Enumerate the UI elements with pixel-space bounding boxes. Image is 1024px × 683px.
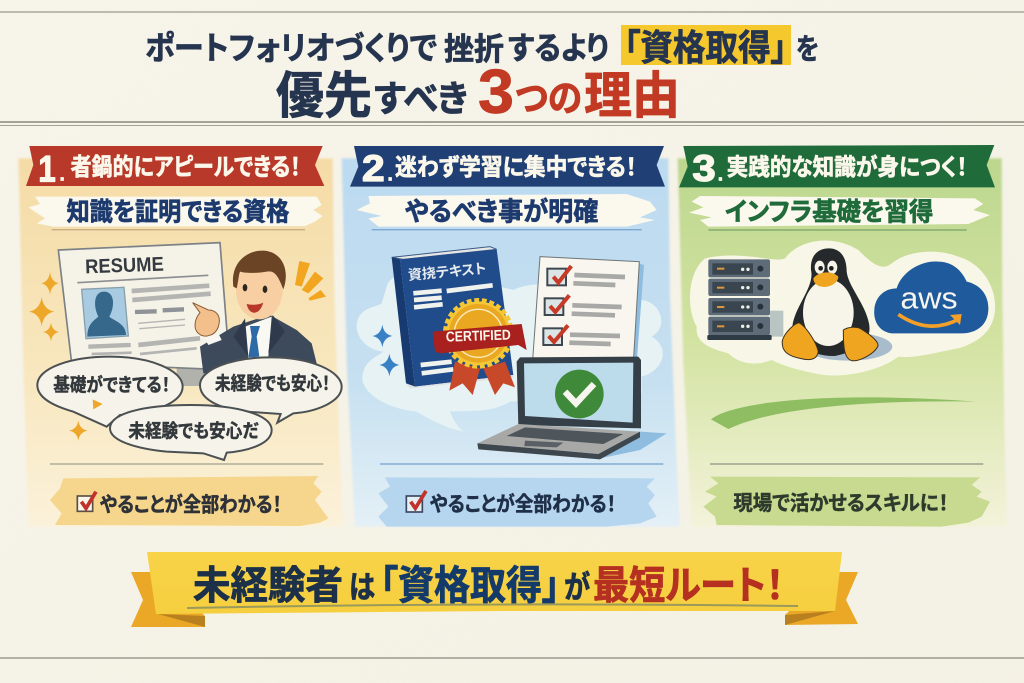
ribbon 2: 2 <box>362 147 385 189</box>
banner text: 未経験者 <box>193 565 343 608</box>
callout 2 <box>378 477 657 527</box>
panel 2 background <box>342 158 680 527</box>
icon: aws cloud: aws <box>900 281 958 315</box>
ribbon 3: 実践的な知識が身につく！ <box>727 153 967 180</box>
banner text: 「資格取得」 <box>380 564 560 608</box>
illustration: resume: RESUME <box>85 254 164 278</box>
callout 2: やることが全部わかる！ <box>430 492 616 516</box>
illustration: penguin <box>782 248 892 361</box>
illustration: cloud backdrop <box>690 240 995 375</box>
subheading 2 <box>357 194 657 230</box>
title line 2: 優先 <box>276 68 372 124</box>
title rule <box>0 122 1024 126</box>
title line 1: ポートフォリオづくりで <box>145 30 437 66</box>
icon: checkbox <box>406 491 426 512</box>
banner underline <box>187 604 798 608</box>
ribbon 1 <box>26 146 324 190</box>
illustration: server rack <box>707 259 783 340</box>
ribbon 1: . <box>59 164 65 186</box>
icon: aws cloud <box>874 262 988 333</box>
subheading 3: インフラ基礎を習得 <box>725 199 933 227</box>
title line 1 <box>145 27 819 68</box>
illustration: certified badge <box>433 301 527 395</box>
title line 1: するより <box>508 31 609 66</box>
panel 2: study <box>342 146 680 527</box>
banner text <box>193 564 784 608</box>
ribbon 1: 者鍋的にアピールできる！ <box>71 154 301 181</box>
illustration: cloud backdrop <box>357 269 663 432</box>
title <box>145 25 819 127</box>
title line 1: を <box>796 34 819 66</box>
ribbon 2: . <box>387 164 393 186</box>
panel 1 background <box>18 158 343 527</box>
illustration: textbook: 資挠テキスト <box>407 260 487 283</box>
subheading 3 <box>689 196 990 230</box>
callout 1 <box>50 476 328 526</box>
speech bubble: 未経験でも安心だ: 未経験でも安心だ <box>128 420 259 441</box>
brush swoosh <box>711 397 977 429</box>
illustration: textbook <box>392 247 514 388</box>
top rule <box>0 11 1024 13</box>
banner text: 最短ルート！ <box>593 565 784 608</box>
subheading 2: やるべき事が明確 <box>404 197 598 227</box>
illustration: laptop <box>477 357 667 459</box>
bottom rule <box>0 657 1024 659</box>
title line 2 <box>276 58 680 127</box>
callout 3: 現場で活かせるスキルに！ <box>733 492 948 515</box>
callout 1: やることが全部わかる！ <box>100 493 282 517</box>
illustration: certified badge: CERTIFIED <box>446 327 511 346</box>
callout 3 <box>703 477 990 527</box>
banner left tail <box>131 572 205 627</box>
title line 2: 3 <box>478 58 514 127</box>
panel 3 background <box>678 158 1007 527</box>
speech bubble: 基礎ができてる: 基礎ができてる！ <box>53 375 170 396</box>
title line 2: すべき <box>374 78 468 119</box>
illustration: checklist <box>533 257 644 363</box>
icon: emphasis rays <box>295 261 326 301</box>
speech bubble: 基礎ができてる <box>37 357 183 427</box>
ribbon 3 <box>679 145 995 189</box>
ribbon 2: 迷わず学習に集中できる！ <box>395 154 637 180</box>
icon: sparkles <box>29 272 88 441</box>
ribbon 3: . <box>718 164 723 186</box>
panel 3: infrastructure <box>678 145 1007 527</box>
ribbon 1: 1 <box>38 148 56 190</box>
speech bubble: 未経験でも安心だ <box>110 405 272 460</box>
title line 2: つの <box>515 78 582 119</box>
panel 1: resume <box>18 146 343 527</box>
illustration: businessman <box>193 251 317 373</box>
ribbon 3: 3 <box>692 147 716 189</box>
speech bubble: 未経験でも安心: 未経験でも安心！ <box>215 373 330 394</box>
title highlight <box>621 25 791 65</box>
subheading 1: 知識を証明できる資格 <box>67 199 289 227</box>
banner text: は <box>349 570 375 605</box>
banner body <box>147 552 842 614</box>
banner text: が <box>564 570 590 605</box>
title line 1: 「資格取得」 <box>624 27 787 68</box>
title line 2: 理由 <box>584 68 680 124</box>
bottom banner <box>131 552 858 627</box>
banner right tail <box>785 572 858 625</box>
icon: checkbox <box>77 492 96 511</box>
icon: sparkles <box>372 325 399 376</box>
title line 1: 挫折 <box>444 32 504 67</box>
ribbon 2 <box>350 146 665 189</box>
illustration: resume <box>58 243 230 386</box>
speech bubble: 未経験でも安心 <box>200 357 342 423</box>
